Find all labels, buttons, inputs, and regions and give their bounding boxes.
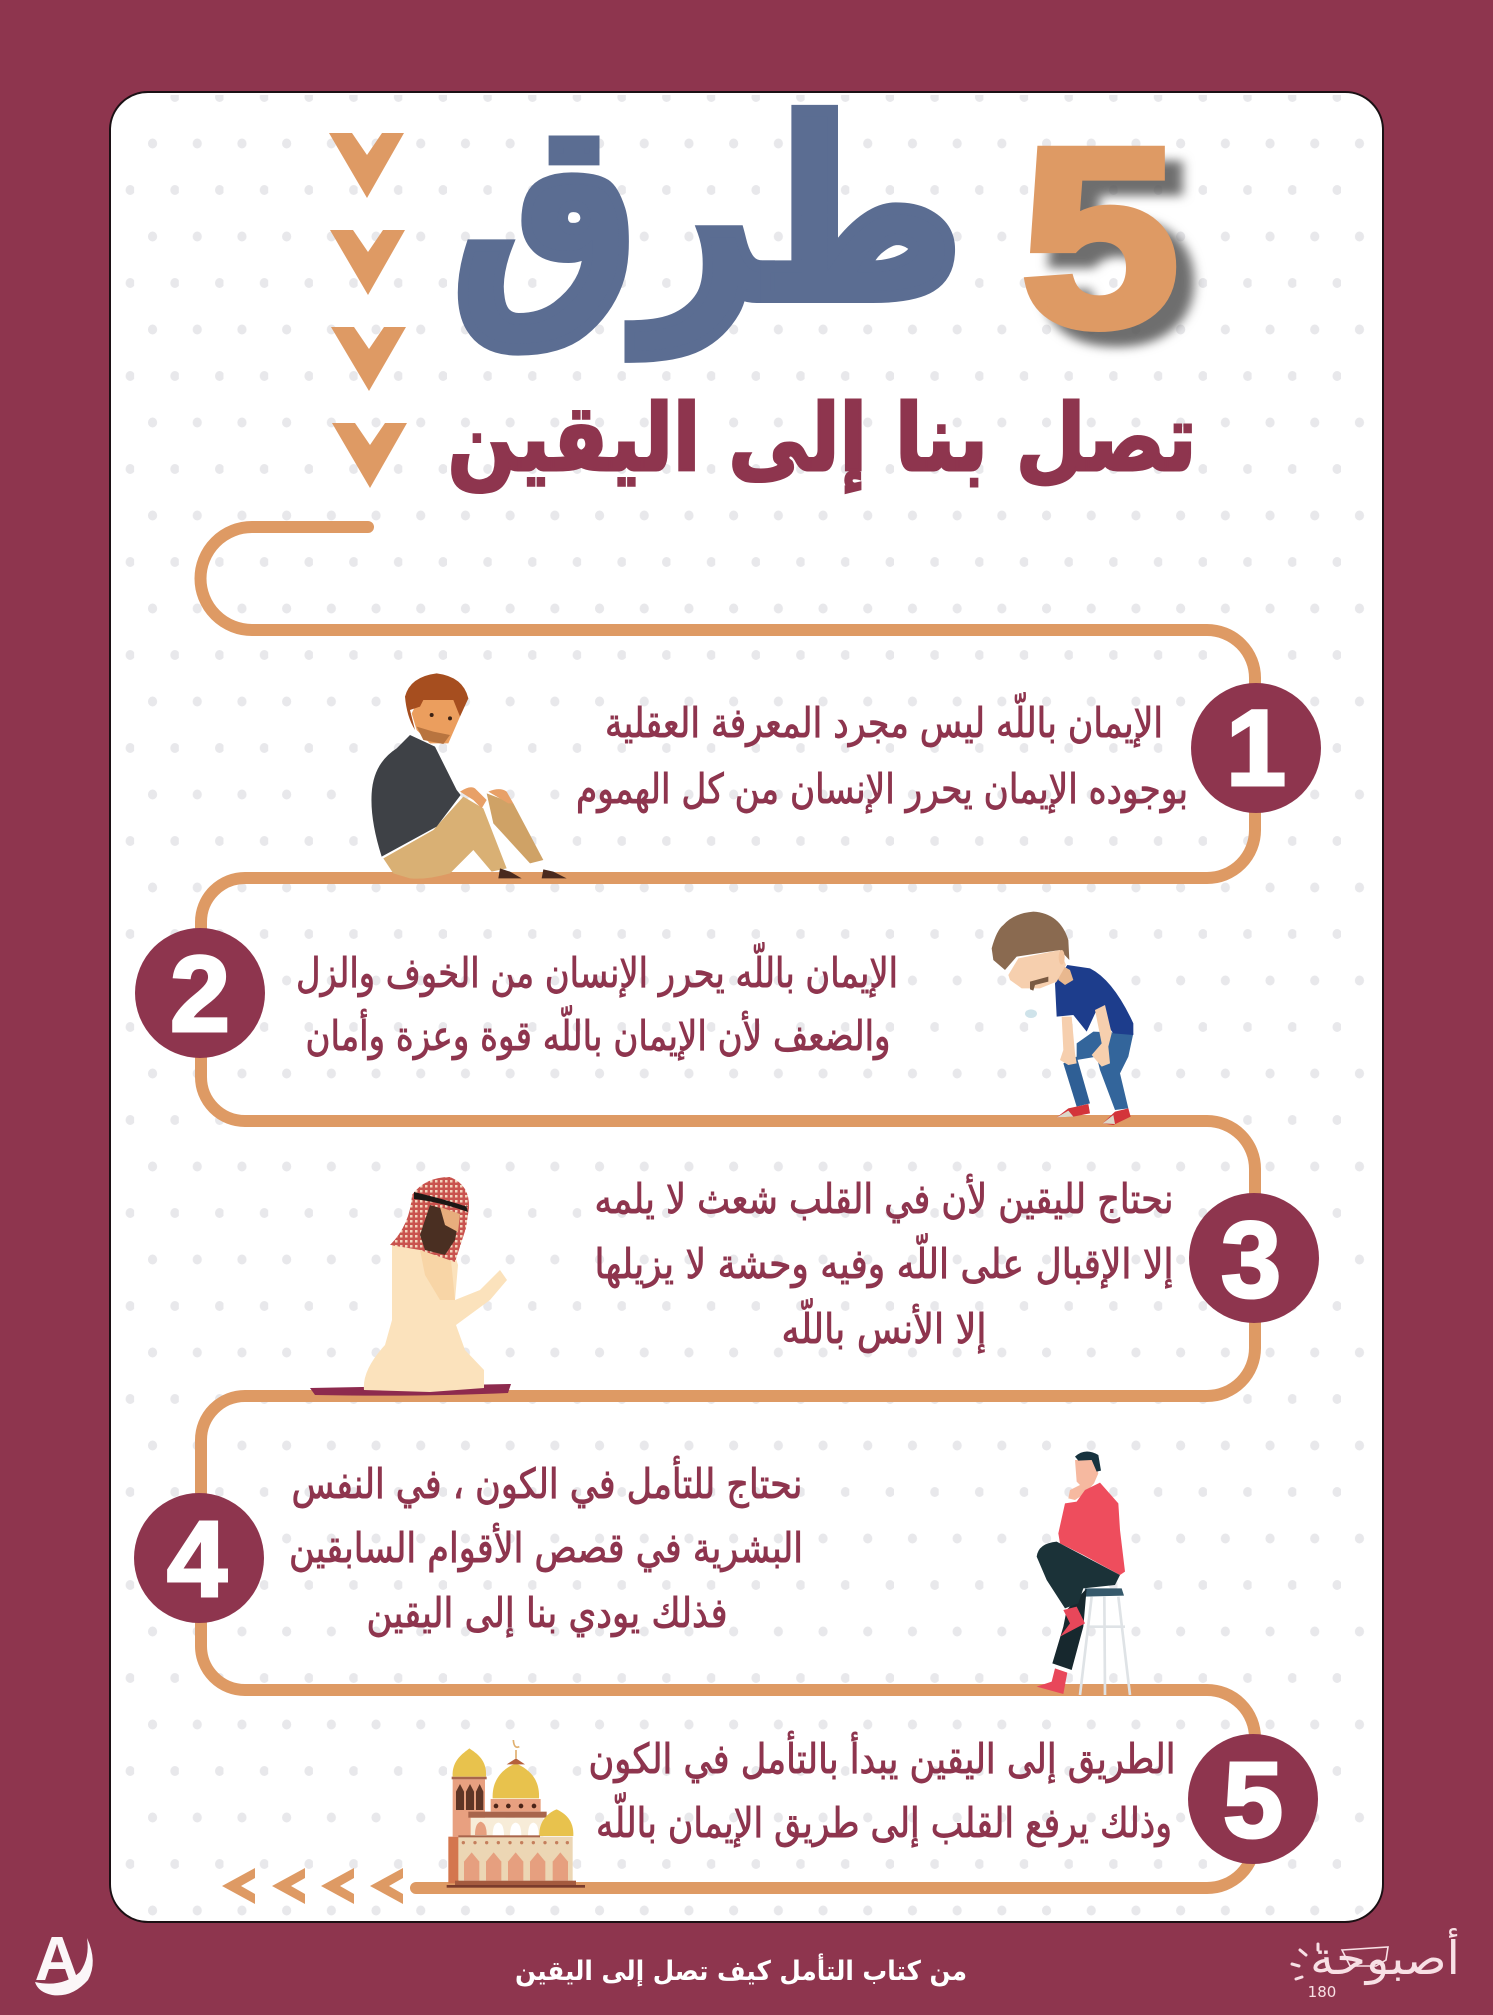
circle 4: 4 — [167, 1498, 227, 1619]
circle 1 — [1191, 683, 1321, 813]
logo: right handwritten mark: 180 — [1308, 1983, 1336, 2001]
text block 5: الطريق إلى اليقين يبدأ بالتأمل في الكون — [588, 1731, 1176, 1784]
text block 4 — [289, 1456, 803, 1637]
panel: white card — [110, 92, 1383, 1922]
illustration: tired boy — [992, 912, 1133, 1125]
circle 5: 5 — [1223, 1739, 1283, 1860]
text block 2 — [296, 942, 898, 1060]
circle 1: 1 — [1226, 687, 1286, 808]
text block 1: بوجوده الإيمان يحرر الإنسان من كل الهموم — [576, 765, 1188, 813]
text block 2: والضعف لأن الإيمان باللّه قوة وعزة وأمان — [306, 1005, 890, 1060]
text block 1: الإيمان باللّه ليس مجرد المعرفة العقلية — [605, 692, 1163, 747]
circle 3: 3 — [1221, 1199, 1281, 1320]
illustration: mosque — [447, 1740, 585, 1888]
text block 3 — [594, 1173, 1174, 1353]
illustration: thinking man on stool — [1037, 1452, 1130, 1695]
subtitle: تصل بنا إلى اليقين — [448, 385, 1196, 493]
icon: down chevrons — [329, 133, 407, 488]
illustration: sad seated man — [371, 673, 567, 879]
circle 3 — [1189, 1193, 1319, 1323]
logo: right handwritten mark: أصبوحة — [1310, 1928, 1460, 1986]
illustration: praying man — [310, 1177, 511, 1396]
text block 2: الإيمان باللّه يحرر الإنسان من الخوف والزل — [296, 942, 898, 997]
logo: left A mark: A — [35, 1925, 79, 1994]
text block 3: إلا الأنس باللّه — [782, 1298, 986, 1353]
text block 3: نحتاج لليقين لأن في القلب شعث لا يلمه — [594, 1173, 1174, 1224]
footer source line: من كتاب التأمل كيف تصل إلى اليقين — [515, 1953, 967, 1987]
circle 2 — [135, 928, 265, 1058]
text block 5: وذلك يرفع القلب إلى طريق الإيمان باللّه — [596, 1792, 1172, 1847]
text block 4: البشرية في قصص الأقوام السابقين — [289, 1522, 803, 1573]
icon: left chevrons — [222, 1868, 403, 1904]
logo: right handwritten mark — [1292, 1928, 1460, 2001]
circle 4 — [134, 1493, 264, 1623]
text block 4: نحتاج للتأمل في الكون ، في النفس — [292, 1456, 802, 1509]
text block 5 — [588, 1731, 1176, 1847]
circle 2: 2 — [170, 933, 230, 1054]
title number 5: 5 — [1021, 96, 1179, 380]
circle 5 — [1188, 1734, 1318, 1864]
text block 4: فذلك يودي بنا إلى اليقين — [366, 1589, 728, 1637]
text block 1 — [576, 692, 1188, 813]
winding orange path — [200, 527, 1255, 1888]
title word: طرق — [452, 70, 964, 357]
text block 3: إلا الإقبال على اللّه وفيه وحشة لا يزيلها — [594, 1233, 1174, 1288]
